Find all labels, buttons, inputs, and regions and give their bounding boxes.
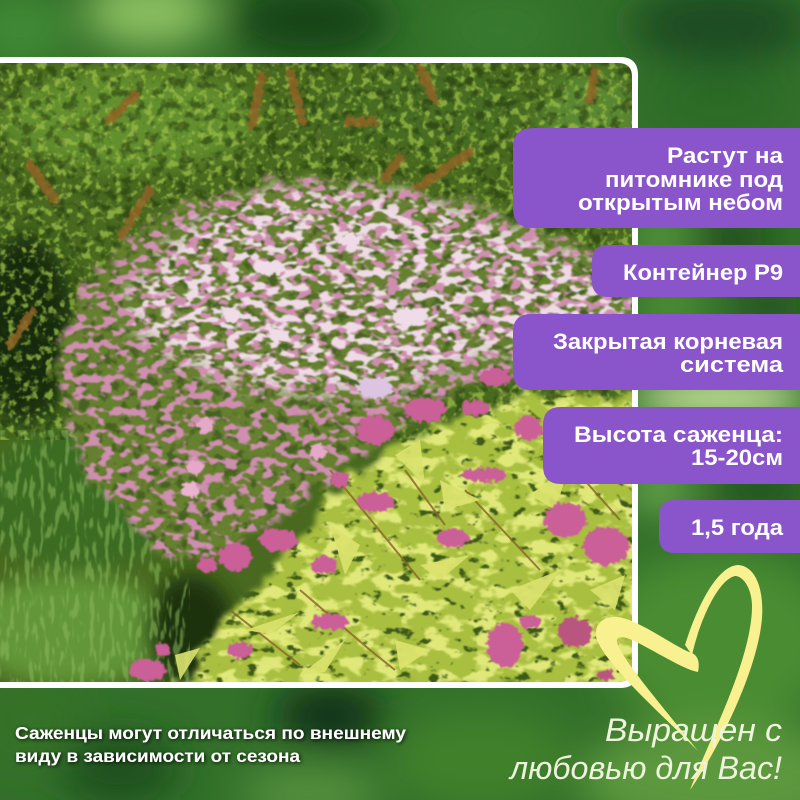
upper foliage texture: [0, 60, 640, 440]
deep pink flower clusters: [129, 368, 629, 681]
icon: yellow hand-drawn heart: [596, 565, 762, 790]
label: open-air nursery: открытым небом: [578, 190, 783, 215]
label: open-air nursery: [513, 128, 800, 228]
label: seedling height: Высота саженца:: [574, 422, 783, 447]
photo card with white frame: [0, 57, 640, 690]
label: open-air nursery: питомнике под: [605, 167, 783, 192]
disclaimer note: виду в зависимости от сезона: [15, 746, 300, 766]
label: seedling height: [543, 407, 800, 484]
large yellow leaves: [175, 440, 625, 680]
label: open-air nursery: Растут на: [667, 143, 784, 168]
mound leaf texture: [51, 178, 632, 559]
slogan: [508, 712, 782, 786]
photo: flowering spirea shrub: [0, 60, 640, 690]
grass area: [0, 430, 190, 685]
label: age: [659, 500, 800, 553]
yellow-green shrub: [169, 389, 632, 682]
label: age: 1,5 года: [691, 515, 784, 540]
label: container P9: Контейнер Р9: [623, 260, 783, 285]
disclaimer note: Саженцы могут отличаться по внешнему: [15, 723, 406, 743]
label: closed root system: [513, 314, 800, 390]
individual pale clusters: [181, 234, 428, 498]
pink flower layer: [48, 170, 632, 562]
label: closed root system: система: [680, 352, 784, 377]
label: seedling height: 15-20см: [691, 445, 783, 470]
pale flower layer, upper mound: [112, 174, 632, 409]
label: container P9: [592, 245, 800, 297]
dark leaf gaps: [170, 390, 632, 682]
label: closed root system: Закрытая корневая: [553, 329, 783, 354]
brown seed heads: [10, 68, 595, 345]
flower mound: [48, 170, 632, 562]
slogan: любовью для Вас!: [508, 750, 782, 786]
bright leaf texture: [170, 390, 632, 682]
slogan: Выращен с: [605, 712, 782, 748]
disclaimer note: [15, 723, 406, 766]
stems: [230, 430, 620, 670]
